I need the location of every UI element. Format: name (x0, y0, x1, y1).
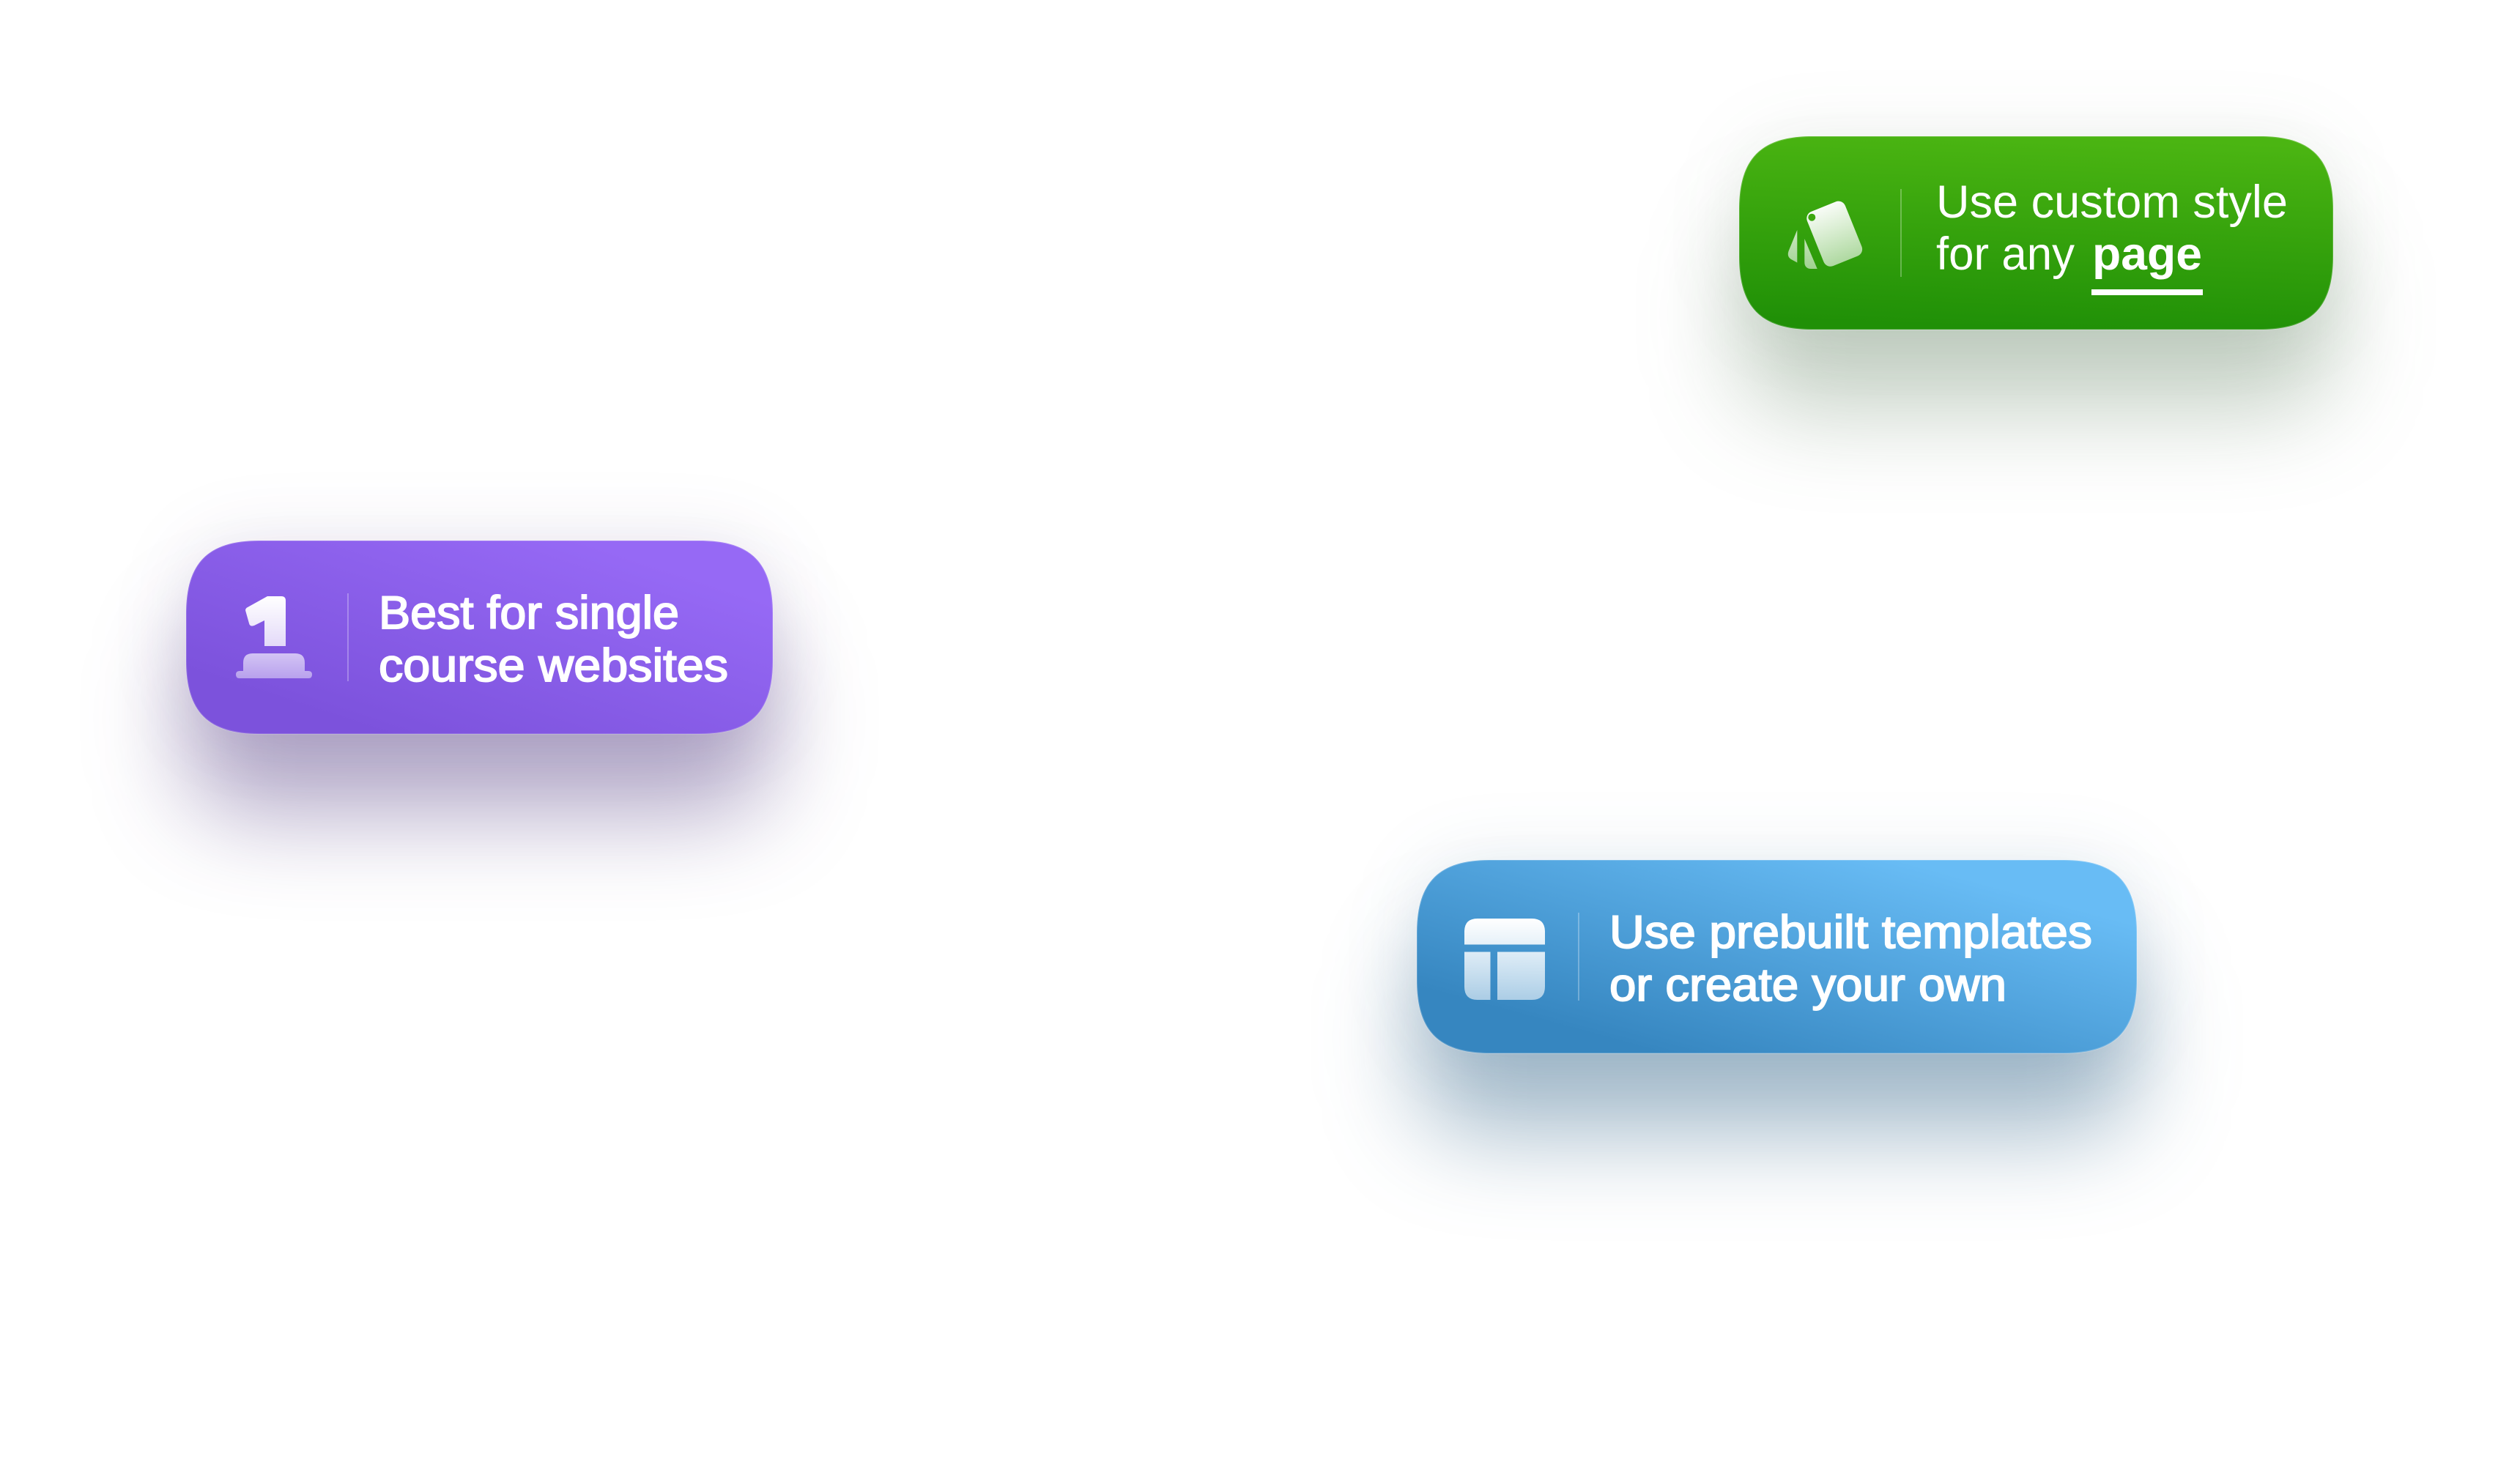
text: use custom style for any page: for any (1936, 229, 2075, 280)
shadow: purple badge (186, 541, 773, 815)
badge background: green (1739, 136, 2333, 330)
text: use prebuilt templates or create your own: Use prebuilt templates (1609, 907, 2092, 958)
badge background: purple (186, 541, 773, 734)
text: use custom style for any page (1936, 177, 2288, 295)
shadow: blue badge (1417, 860, 2137, 1134)
divider (347, 593, 349, 681)
panel: single course badge (186, 541, 773, 815)
divider (1578, 913, 1579, 1001)
text: best for single course websites: course websites (379, 640, 728, 691)
divider (1900, 189, 1902, 277)
icon: swatch cards (1788, 199, 1864, 269)
badge background: blue (1417, 860, 2137, 1053)
text: use custom style for any page: page (2092, 229, 2202, 280)
icon: template layout (1464, 919, 1545, 1000)
shadow: green badge (1739, 136, 2333, 410)
text: use prebuilt templates or create your own: or create your own (1609, 960, 2006, 1011)
text: best for single course websites: Best for single (379, 587, 679, 639)
icon: number one on pedestal (236, 596, 312, 678)
text: use prebuilt templates or create your own (1609, 907, 2092, 1011)
text: use custom style for any page: Use custom style (1936, 177, 2288, 228)
panel: custom style badge (1739, 136, 2333, 410)
panel: templates badge (1417, 860, 2137, 1134)
text: best for single course websites (379, 587, 728, 691)
